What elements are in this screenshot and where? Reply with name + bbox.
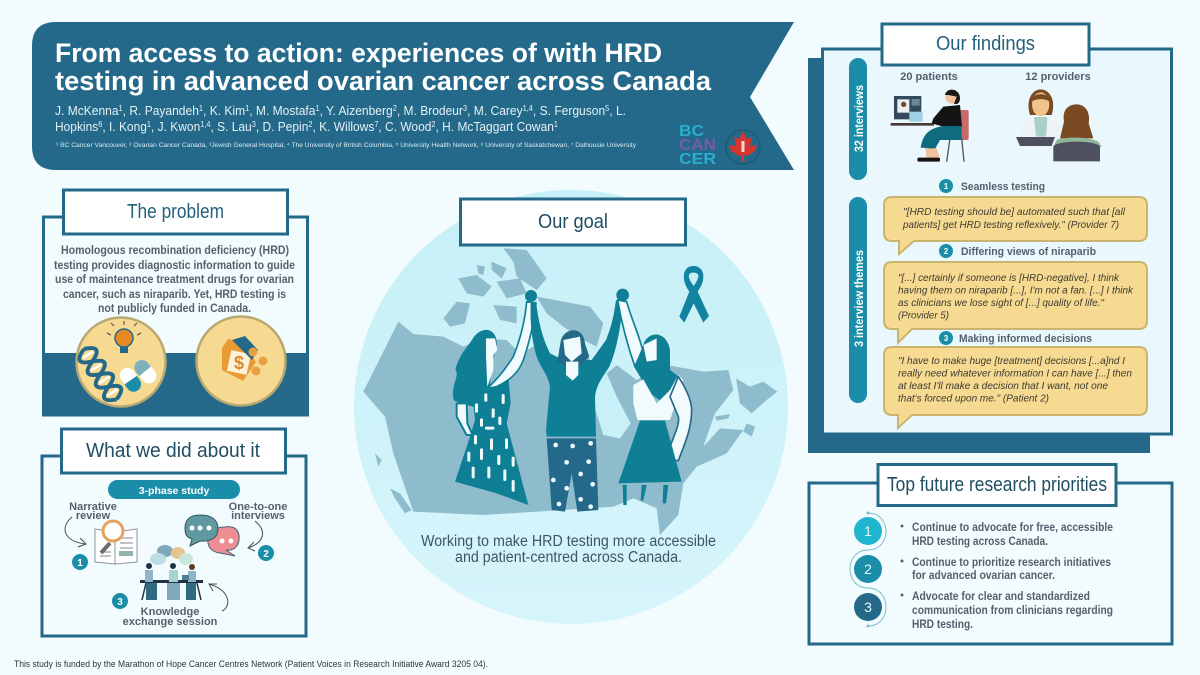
authors: 1 [119, 104, 123, 113]
heading: the problem [64, 190, 288, 234]
woman: left [453, 290, 537, 505]
priorities list: for advanced ovarian cancer. [912, 570, 1055, 582]
map of Canada [363, 248, 777, 535]
quote bubble 1 [884, 197, 1147, 254]
quote bubble 2 [884, 262, 1147, 343]
label: narrative review [69, 501, 117, 522]
logo: BC Cancer: BC [679, 123, 704, 140]
theme 1 heading [939, 179, 1045, 193]
authors: 1,4 [523, 104, 533, 113]
label: narrative review: review [76, 510, 111, 522]
goal statement: and patient-centred across Canada. [455, 549, 682, 566]
heading: top future research priorities [878, 464, 1116, 506]
number 1 [72, 554, 88, 570]
numbered steps: 3 [864, 599, 872, 615]
authors: 7 [374, 120, 379, 129]
heading: the problem: The problem [127, 201, 224, 223]
quote bubble 1: patients] get HRD testing reflexively." (Provider 7) [902, 219, 1119, 231]
authors: Hopkins [55, 119, 102, 134]
panel: our findings [808, 24, 1172, 453]
authors: 1,4 [200, 120, 211, 129]
label: 12 providers: 12 providers [1025, 71, 1091, 83]
authors: , D. Pepin [256, 119, 308, 134]
theme 3 heading: Making informed decisions [959, 333, 1092, 345]
authors: , S. Lau [210, 119, 252, 134]
goal statement [421, 533, 716, 566]
authors: , M. Brodeur [397, 103, 464, 118]
authors: , H. McTaggart Cowan [436, 119, 554, 134]
problem text [54, 245, 295, 315]
number 2: 2 [263, 549, 269, 560]
authors: 1 [315, 104, 320, 113]
quote bubble 3: that's forced upon me." (Patient 2) [898, 392, 1049, 404]
priorities list: Continue to advocate for free, accessible [912, 522, 1113, 534]
authors: , I. Kong [102, 119, 147, 134]
problem text: testing provides diagnostic information to guide [54, 260, 295, 272]
authors: , S. Ferguson [533, 103, 605, 118]
label: 20 patients: 20 patients [900, 71, 958, 83]
authors: 2 [431, 120, 436, 129]
authors: 1 [147, 120, 152, 129]
theme 2 heading: 2 [944, 247, 949, 256]
priorities list: communication from clinicians regarding [912, 605, 1113, 617]
panel: the problem [42, 190, 309, 416]
authors: 6 [98, 120, 103, 129]
theme 3 heading: 3 [944, 334, 949, 343]
quote bubble 3 [884, 347, 1147, 428]
number 3 [112, 593, 128, 609]
heading: what we did about it: What we did about it [86, 440, 260, 462]
authors: J. McKenna [55, 103, 124, 118]
panel: our goal [354, 190, 788, 624]
icon: book and magnifier [95, 521, 137, 564]
priorities list: Continue to prioritize research initiatives [912, 557, 1111, 569]
authors: 2 [393, 104, 397, 113]
logo: Marathon of Hope [726, 130, 760, 164]
heading: our findings: Our findings [936, 33, 1035, 55]
label: one-to-one interviews [229, 501, 287, 522]
authors: , C. Wood [378, 119, 431, 134]
quote bubble 2: as clinicians we lose sight of [...] quality of life." [898, 297, 1105, 309]
woman: right [616, 289, 692, 505]
numbered steps: 1 [864, 523, 872, 539]
number 3: 3 [117, 597, 123, 608]
panel: what we did about it [42, 429, 306, 636]
panel: top future research priorities [809, 464, 1172, 644]
icon: price tag [196, 316, 286, 406]
label: knowledge exchange session: Knowledge [141, 606, 199, 618]
authors: , K. Willows [312, 119, 375, 134]
logo: BC Cancer: CER [679, 151, 716, 168]
authors: 3 [463, 104, 468, 113]
problem text: use of maintenance treatment drugs for ovarian [55, 274, 294, 286]
authors: , M. Mostafa [249, 103, 316, 118]
affiliations: ¹ BC Cancer Vancouver, ² Ovarian Cancer Canada, ³Jewish General Hospital, ⁴ The University of British Columbia, ⁵ University Health Network, ⁶ University of Saskatchewan, ⁷ Dalhousie University [56, 142, 637, 149]
authors: 1 [245, 104, 250, 113]
quote bubble 3: really need whatever information I can have [...] then [898, 368, 1132, 380]
authors: 5 [605, 104, 610, 113]
theme 1 heading: Seamless testing [961, 181, 1045, 193]
authors: , J. Kwon [151, 119, 200, 134]
label: knowledge exchange session: exchange session [123, 616, 218, 628]
illustration: patient on video call [891, 90, 969, 162]
illustration: provider with patient [1016, 89, 1102, 161]
authors: , K. Kim [203, 103, 245, 118]
quote bubble 2: having them on niraparib [...], I'm not a fan. [...] I think [898, 284, 1134, 296]
goal statement: Working to make HRD testing more accessible [421, 533, 716, 550]
heading: our findings [882, 24, 1089, 65]
authors: 3 [252, 120, 256, 129]
label: knowledge exchange session [123, 606, 218, 628]
authors: , R. Payandeh [123, 103, 199, 118]
problem text: not publicly funded in Canada. [98, 303, 251, 315]
numbered steps: 2 [864, 561, 872, 577]
number 1: 1 [77, 558, 83, 569]
problem text: cancer, such as niraparib. Yet, HRD testing is [63, 289, 286, 301]
authors: , M. Carey [467, 103, 523, 118]
heading: our goal [460, 199, 686, 245]
title banner [32, 22, 794, 170]
quote bubble 1: "[HRD testing should be] automated such that [all [903, 206, 1126, 218]
arrow: knowledge exchange [209, 584, 228, 611]
authors [55, 103, 626, 134]
heading: what we did about it [62, 429, 286, 473]
pill: 32 interviews: 32 interviews [854, 85, 866, 152]
quote bubble 3: at least I'll make a decision that I want, not one [898, 380, 1108, 392]
3-phase study pill: 3-phase study [139, 485, 209, 497]
pill: 3 interview themes: 3 interview themes [854, 250, 866, 347]
authors: 1 [199, 104, 204, 113]
priorities list: HRD testing across Canada. [912, 536, 1048, 548]
logo: BC Cancer [679, 123, 716, 168]
heading: our goal: Our goal [538, 211, 608, 233]
title [55, 38, 712, 96]
title: testing in advanced ovarian cancer across Canada [55, 66, 712, 96]
heading: top future research priorities: Top future research priorities [887, 474, 1107, 496]
authors: 2 [308, 120, 313, 129]
label: one-to-one interviews: One-to-one [229, 501, 287, 513]
footer: funding note: This study is funded by the Marathon of Hope Cancer Centres Network (Patient Voices in Research Initiative Award 3205 04). [14, 659, 488, 669]
priorities list: Advocate for clear and standardized [912, 591, 1090, 603]
icon: teal ribbon [679, 266, 709, 323]
logo: BC Cancer: CAN [679, 137, 716, 154]
icon: group at table [140, 545, 203, 600]
priorities list: HRD testing. [912, 619, 973, 631]
3-phase study pill [108, 480, 240, 499]
number 2 [258, 545, 274, 561]
icon: DNA, bulb and pills [76, 318, 166, 406]
label: one-to-one interviews: interviews [231, 510, 285, 522]
theme 1 heading: 1 [944, 182, 949, 191]
icon: price tag: $ [234, 353, 244, 373]
quote bubble 2: (Provider 5) [898, 310, 949, 322]
authors: , L. [609, 103, 626, 118]
icon: chat bubbles [185, 515, 239, 556]
illustration: three women with raised hands [453, 289, 692, 512]
priorities list [900, 522, 1113, 631]
quote bubble 3: "I have to make huge [treatment] decisions [...a]nd I [898, 355, 1125, 367]
numbered steps [850, 512, 886, 628]
authors: , Y. Aizenberg [320, 103, 393, 118]
woman: middle [531, 300, 623, 512]
arrow: interviews [248, 521, 263, 551]
authors: 1 [554, 120, 559, 129]
problem text: Homologous recombination deficiency (HRD) [61, 245, 289, 257]
pill: 3 interview themes [849, 197, 867, 403]
title: From access to action: experiences of with HRD [55, 38, 662, 68]
quote bubble 2: "[...] certainly if someone is [HRD-negative], I think [898, 272, 1120, 284]
theme 2 heading: Differing views of niraparib [961, 246, 1096, 258]
label: narrative review: Narrative [69, 501, 117, 513]
pill: 32 interviews [849, 58, 867, 180]
arrow: narrative review [65, 517, 86, 547]
